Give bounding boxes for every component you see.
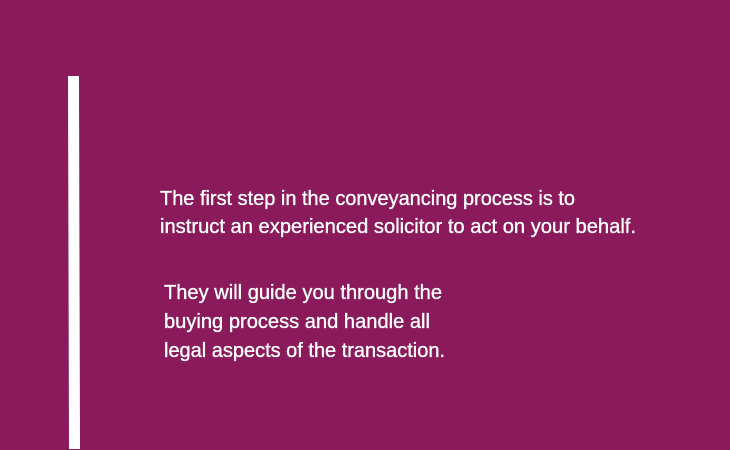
text block: solicitor guidance: They will guide you through the (164, 281, 442, 304)
white vertical bar (68, 76, 80, 449)
text block: first step (160, 187, 636, 238)
text block: solicitor guidance: buying process and handle all (164, 310, 430, 333)
text block: first step: The first step in the conveyancing process is to (160, 187, 575, 210)
text block: solicitor guidance: legal aspects of the transaction. (164, 339, 445, 362)
text block: first step: instruct an experienced solicitor to act on your behalf. (160, 215, 636, 238)
text block: solicitor guidance (164, 281, 445, 362)
